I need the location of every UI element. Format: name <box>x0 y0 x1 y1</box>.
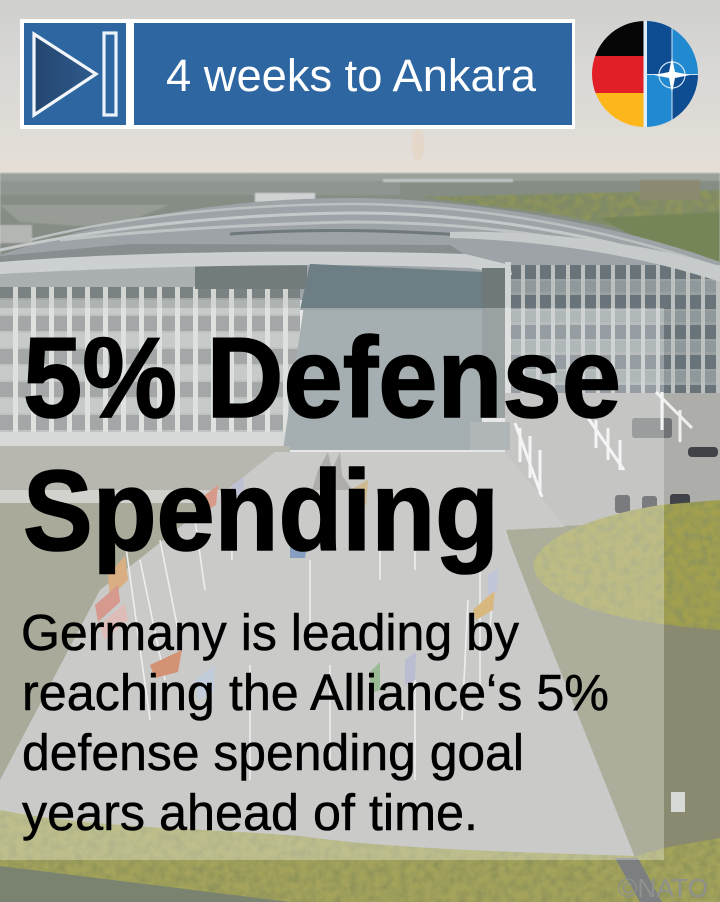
right facade <box>505 265 720 393</box>
white banner frame <box>20 19 575 129</box>
flag poles and flags <box>95 477 498 780</box>
body text: Germany is leading by <box>21 604 519 661</box>
flag rows by entrance <box>515 392 692 497</box>
small box on lawn <box>671 792 685 812</box>
glass atrium <box>283 262 511 450</box>
sky <box>0 0 720 176</box>
icon: play and pause button <box>24 23 126 125</box>
left grounds <box>0 446 290 496</box>
header: blue banner <box>20 19 575 129</box>
NATO compass star <box>654 57 690 93</box>
yellow lawn <box>533 500 720 630</box>
right lawn <box>505 520 720 902</box>
heading <box>23 315 621 575</box>
heading: Spending <box>23 448 499 575</box>
rear roofs <box>0 198 720 300</box>
body text: reaching the Alliance‘s 5% <box>22 664 609 721</box>
cars <box>615 418 718 513</box>
cloud streak <box>412 129 424 161</box>
plaza <box>0 452 636 860</box>
body text: defense spending goal <box>22 724 524 781</box>
path strip <box>615 858 662 902</box>
right ground and road <box>505 393 720 530</box>
heading: 5% Defense <box>23 315 621 442</box>
foreground lawn <box>0 860 300 902</box>
translucent text panel <box>0 308 664 860</box>
distant town and trees <box>0 173 720 263</box>
banner title: 4 weeks to Ankara <box>166 50 537 101</box>
body text <box>21 604 609 841</box>
logo: Germany and NATO roundel <box>592 21 698 127</box>
monument <box>312 452 352 490</box>
left facade <box>0 262 300 448</box>
banner title <box>134 23 572 125</box>
body text: years ahead of time. <box>22 784 478 841</box>
hedge <box>0 810 720 902</box>
front roof <box>0 244 512 275</box>
